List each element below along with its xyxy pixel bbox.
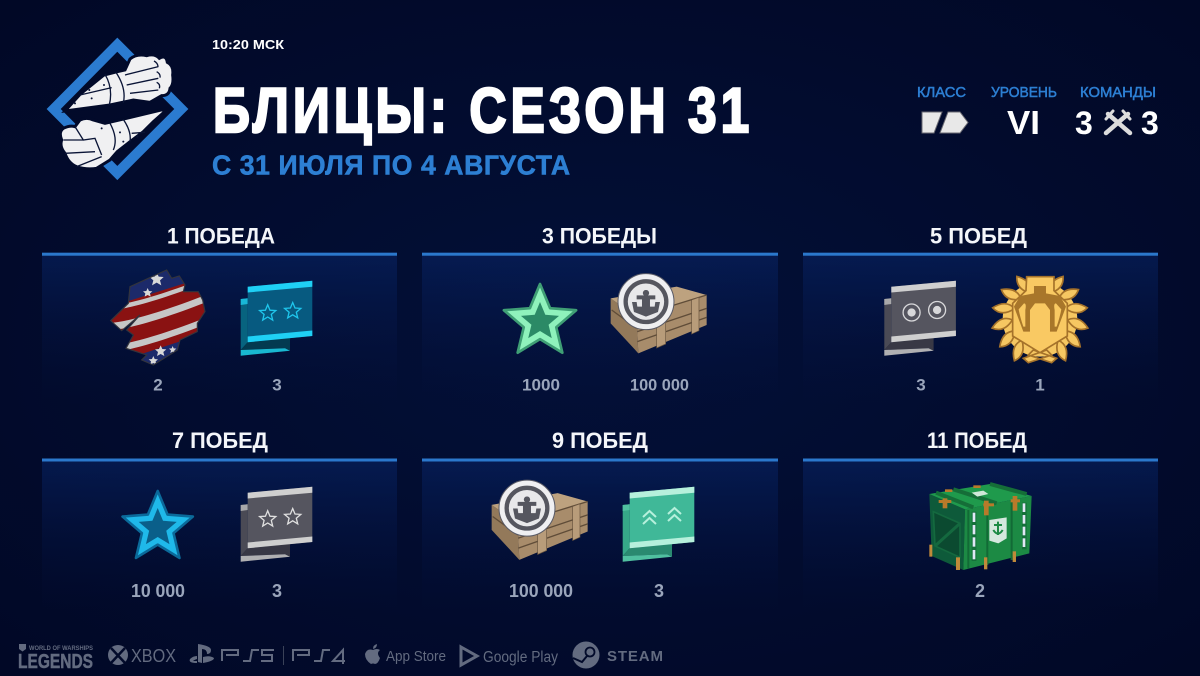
label: tier: УРОВЕНЬ: [991, 85, 1057, 101]
heading: 9 ПОБЕД: [552, 428, 648, 453]
icon: golden laurel medal: [991, 273, 1089, 363]
value: 3: 3: [916, 376, 926, 394]
panel: 3 wins: [422, 224, 778, 405]
panel: 7 wins: [42, 428, 397, 610]
icon: destroyer class: [922, 112, 968, 133]
value: 1: 1: [1035, 376, 1045, 394]
value: 2: 2: [975, 581, 985, 601]
team size right: 3: [1141, 105, 1159, 141]
value: 3: 3: [654, 581, 664, 601]
icon: wooden crate with credits badge: [492, 480, 588, 560]
logo: Steam: [572, 642, 663, 668]
logo: World of Warships Legends: LEGENDS: [18, 651, 93, 673]
icon: green star: [504, 284, 576, 353]
icon: wooden crate with credits badge: [611, 274, 707, 353]
tier value: VI: [1007, 104, 1040, 141]
team size left: 3: [1075, 105, 1093, 141]
icon: cyan signal flag with stars: [241, 281, 312, 356]
subtitle: dates: С 31 ИЮЛЯ ПО 4 АВГУСТА: [212, 149, 570, 181]
panel: 9 wins: [422, 428, 778, 610]
heading: 1 ПОБЕДА: [167, 224, 275, 248]
logo: App Store: [365, 644, 446, 665]
icon: blue star: [123, 491, 193, 558]
logo: Steam: STEAM: [607, 648, 663, 665]
logo: Xbox: [108, 645, 176, 666]
logo: Google Play: [461, 647, 558, 666]
heading: 3 ПОБЕДЫ: [542, 224, 657, 248]
label: class: КЛАСС: [917, 85, 966, 101]
logo: gauntlets in a diamond: [54, 45, 181, 173]
panel: 5 wins: [803, 224, 1158, 405]
footer: platform logos: [18, 642, 663, 673]
icon: grey signal flag with stars: [241, 487, 312, 562]
value: 100 000: 100 000: [509, 581, 573, 601]
value: 100 000: 100 000: [630, 376, 689, 394]
logo: Xbox: XBOX: [131, 646, 176, 666]
icon: green signal flag with chevrons: [623, 487, 694, 562]
value: 10 000: 10 000: [131, 581, 185, 601]
timestamp: 10:20 МСК: [212, 38, 284, 52]
logo: World of Warships Legends: WORLD OF WARSHIPS: [29, 645, 94, 652]
icon: grey signal flag with credits: [884, 281, 956, 356]
icon: US flag patch: [110, 269, 206, 366]
logo: App Store: App Store: [386, 648, 446, 665]
value: 3: 3: [272, 581, 282, 601]
battle info: class, tier, teams: [917, 85, 1159, 141]
logo: PlayStation 5 and 4: [190, 644, 345, 665]
panel: 1 win: [42, 228, 397, 390]
logo: Google Play: Google Play: [483, 649, 558, 666]
title: БЛИЦЫ: СЕЗОН 31: [213, 76, 749, 146]
heading: 11 ПОБЕД: [927, 428, 1027, 453]
heading: 7 ПОБЕД: [172, 428, 268, 453]
icon: crossed swords: [1106, 111, 1130, 133]
panel: 11 wins: [803, 428, 1158, 610]
heading: 5 ПОБЕД: [930, 224, 1027, 248]
value: 3: 3: [272, 376, 282, 394]
value: 1000: 1000: [522, 376, 560, 394]
logo: World of Warships Legends: [18, 644, 94, 673]
icon: green container: [929, 484, 1032, 570]
value: 2: 2: [153, 376, 163, 394]
label: teams: КОМАНДЫ: [1080, 85, 1156, 101]
